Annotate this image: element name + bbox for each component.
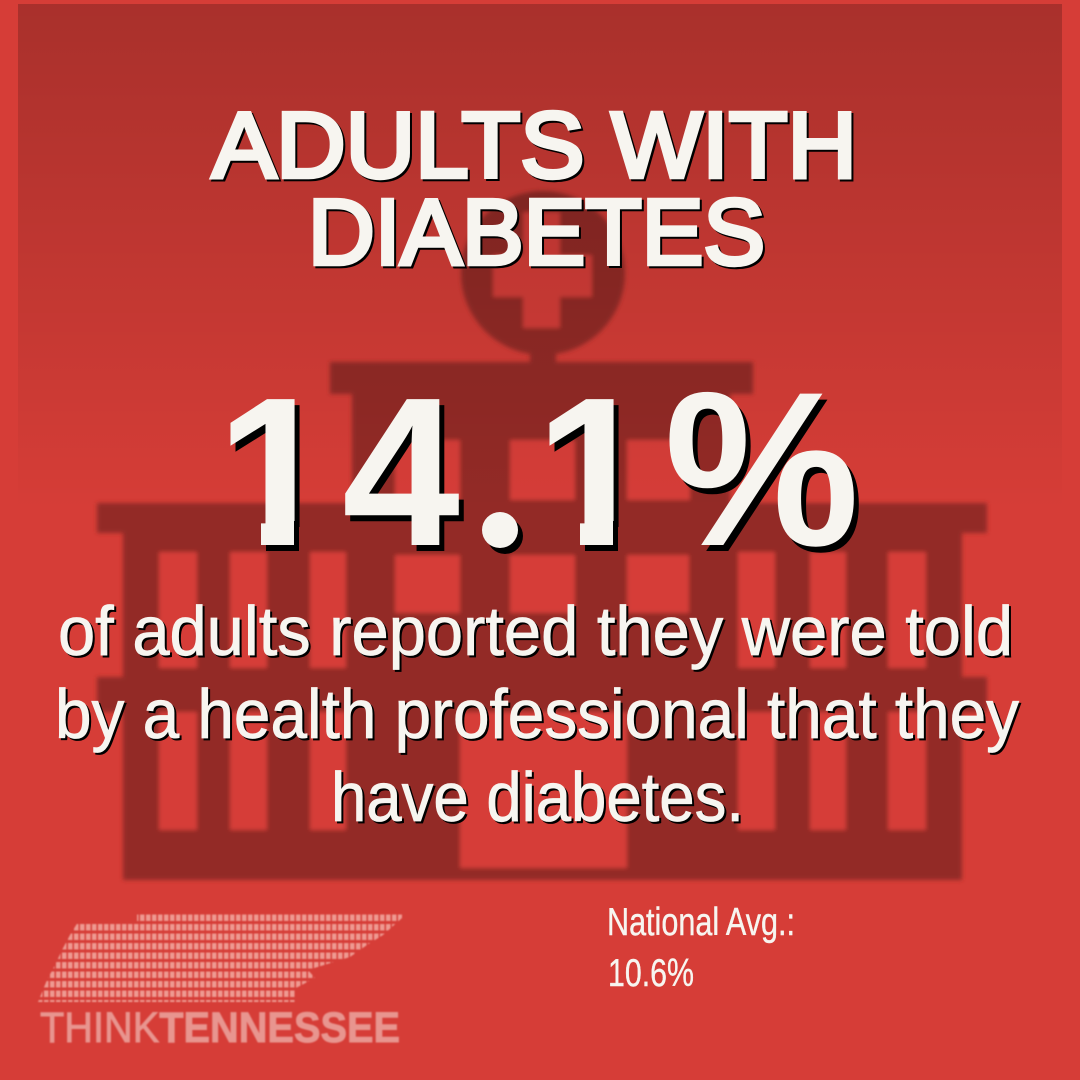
description text: have diabetes. bbox=[331, 758, 744, 836]
description text: of adults reported they were told bbox=[58, 592, 1013, 670]
description text: by a health professional that they bbox=[55, 675, 1019, 753]
national average callout: National Avg.: bbox=[607, 901, 795, 944]
title: ADULTS WITH bbox=[212, 93, 857, 197]
icon: medical cross sign bbox=[461, 191, 625, 364]
description text bbox=[55, 592, 1019, 836]
title: DIABETES bbox=[308, 180, 765, 284]
main statistic bbox=[230, 392, 859, 554]
panel: dark fading top overlay bbox=[18, 4, 1062, 510]
title bbox=[212, 93, 857, 284]
building upper storey bbox=[352, 394, 730, 514]
logo wordmark: THINKTENNESSEE bbox=[40, 1004, 400, 1052]
building roof beam bbox=[330, 362, 753, 394]
icon: hospital building bbox=[97, 191, 987, 880]
lower beam bbox=[97, 677, 987, 712]
main beam bbox=[97, 503, 987, 533]
building main body bbox=[123, 533, 962, 880]
building windows and door bbox=[159, 440, 926, 868]
icon: Tennessee dot map bbox=[38, 913, 402, 1002]
national average callout bbox=[607, 901, 795, 995]
main statistic: 14.1% bbox=[216, 346, 860, 592]
logo: Think Tennessee bbox=[38, 913, 402, 1052]
national average callout: 10.6% bbox=[608, 952, 694, 995]
